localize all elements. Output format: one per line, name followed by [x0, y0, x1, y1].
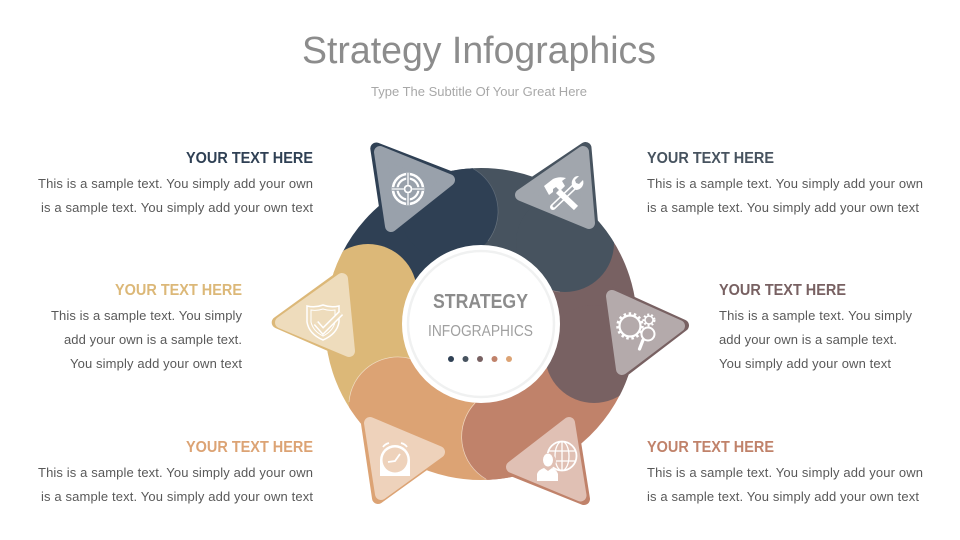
- icon: shield with check: [307, 305, 341, 340]
- text block: top left: [38, 150, 313, 215]
- title: Strategy Infographics: [302, 30, 656, 72]
- text block: top right: [647, 150, 923, 215]
- text block: bottom right: YOUR TEXT HERE: [647, 439, 774, 456]
- text block: middle left: This is a sample text. You simply: [51, 308, 242, 323]
- text block: middle left: You simply add your own text: [70, 356, 242, 371]
- colour dots: [448, 356, 512, 362]
- icon: globe and person: [537, 442, 576, 481]
- text block: bottom right: is a sample text. You simply add your own text: [647, 489, 919, 504]
- text block: top right: is a sample text. You simply add your own text: [647, 200, 919, 215]
- text block: bottom left: is a sample text. You simply add your own text: [41, 489, 313, 504]
- triangle marker: target: [376, 148, 450, 226]
- centre badge: [402, 245, 560, 403]
- text block: bottom left: This is a sample text. You simply add your own: [38, 465, 313, 480]
- triangle marker: globe and person: [511, 423, 584, 499]
- text block: top right: YOUR TEXT HERE: [647, 150, 774, 167]
- text block: middle right: You simply add your own text: [719, 356, 891, 371]
- text block: bottom left: YOUR TEXT HERE: [186, 439, 313, 456]
- icon: alarm clock: [380, 443, 410, 476]
- triangle marker: tools: [519, 148, 592, 223]
- text block: top left: This is a sample text. You simply add your own: [38, 176, 313, 191]
- subtitle: Type The Subtitle Of Your Great Here: [371, 84, 587, 99]
- text block: middle left: YOUR TEXT HERE: [115, 282, 242, 299]
- icon: gears and magnifier: [618, 314, 654, 349]
- centre subheading: INFOGRAPHICS: [428, 323, 533, 340]
- text block: middle left: [51, 282, 242, 371]
- text block: top left: is a sample text. You simply add your own text: [41, 200, 313, 215]
- text block: middle right: YOUR TEXT HERE: [719, 282, 846, 299]
- ring diagram: [327, 168, 635, 480]
- text block: middle right: [719, 282, 912, 371]
- text block: middle left: add your own is a sample text.: [64, 332, 242, 347]
- triangle marker: shield: [278, 277, 349, 353]
- triangle marker: gears: [612, 294, 683, 371]
- triangle marker: alarm clock: [367, 423, 439, 498]
- centre heading: STRATEGY: [433, 291, 529, 313]
- text block: bottom right: This is a sample text. You simply add your own: [647, 465, 923, 480]
- icon: hammer and wrench: [544, 176, 583, 208]
- text block: middle right: add your own is a sample text.: [719, 332, 897, 347]
- text block: bottom right: [647, 439, 923, 504]
- text block: bottom left: [38, 439, 313, 504]
- icon: target: [392, 173, 424, 205]
- text block: middle right: This is a sample text. You simply: [719, 308, 912, 323]
- text block: top right: This is a sample text. You simply add your own: [647, 176, 923, 191]
- text block: top left: YOUR TEXT HERE: [186, 150, 313, 167]
